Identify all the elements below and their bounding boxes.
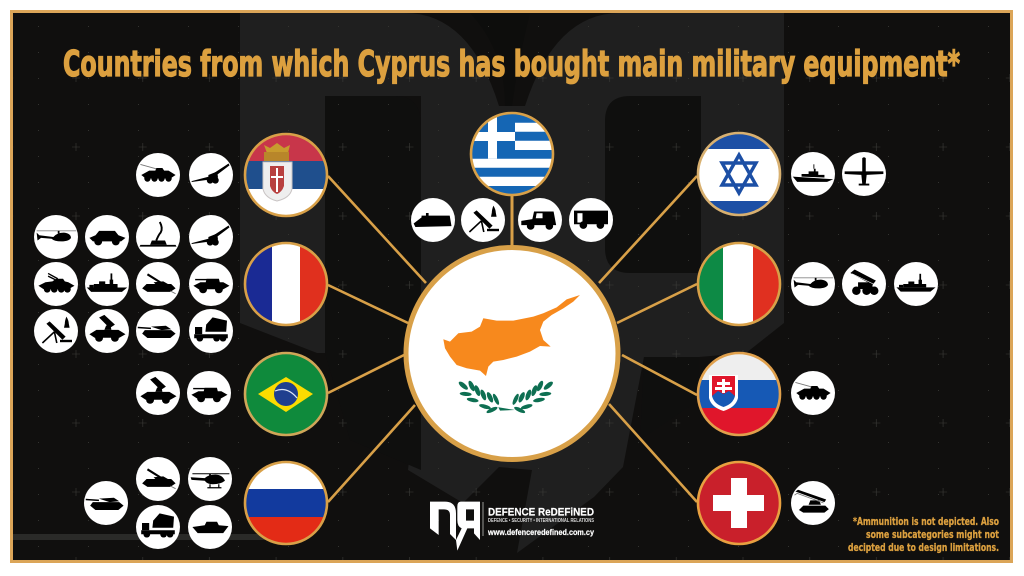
icon: Slovakia vehicle: [791, 371, 835, 415]
flag: Israel: [698, 133, 780, 217]
flag: Slovakia: [698, 353, 780, 436]
logo: Defence ReDefined: www.defenceredefined.com.cy: [487, 527, 594, 537]
icons: Italy: [791, 262, 938, 306]
watermark: NR logo: [240, 13, 784, 553]
icons: Israel: [791, 152, 886, 196]
flag: Greece: [471, 113, 553, 195]
icon: Switzerland air defence: [791, 481, 835, 525]
horizontal light stripe: [13, 534, 275, 540]
logo mark NR: [430, 502, 480, 551]
footnote: [848, 515, 999, 554]
icons: France: [34, 215, 233, 353]
logo: Defence ReDefined: DEFENCE • SECURITY • INTERNATIONAL RELATIONS: [488, 518, 595, 524]
icons: Russia: [84, 457, 232, 549]
icons: Greece: [411, 198, 613, 242]
flag: Brazil: [245, 353, 327, 435]
icons: Brazil: [136, 371, 231, 415]
flag: Italy: [698, 243, 780, 325]
flag: Serbia: [245, 134, 327, 217]
olive wreath: [457, 380, 554, 414]
flag: Switzerland: [698, 462, 780, 544]
central circle: Cyprus flag: [406, 248, 618, 460]
logo: Defence ReDefined: DEFENCE ReDEFiNED: [488, 506, 594, 518]
icons: Serbia: [136, 153, 233, 197]
flag: Russia: [245, 462, 327, 545]
connector lines: [328, 176, 697, 502]
logo: Defence ReDefined: [430, 502, 595, 551]
Cyprus map: [443, 295, 580, 376]
flag: France: [245, 243, 327, 325]
